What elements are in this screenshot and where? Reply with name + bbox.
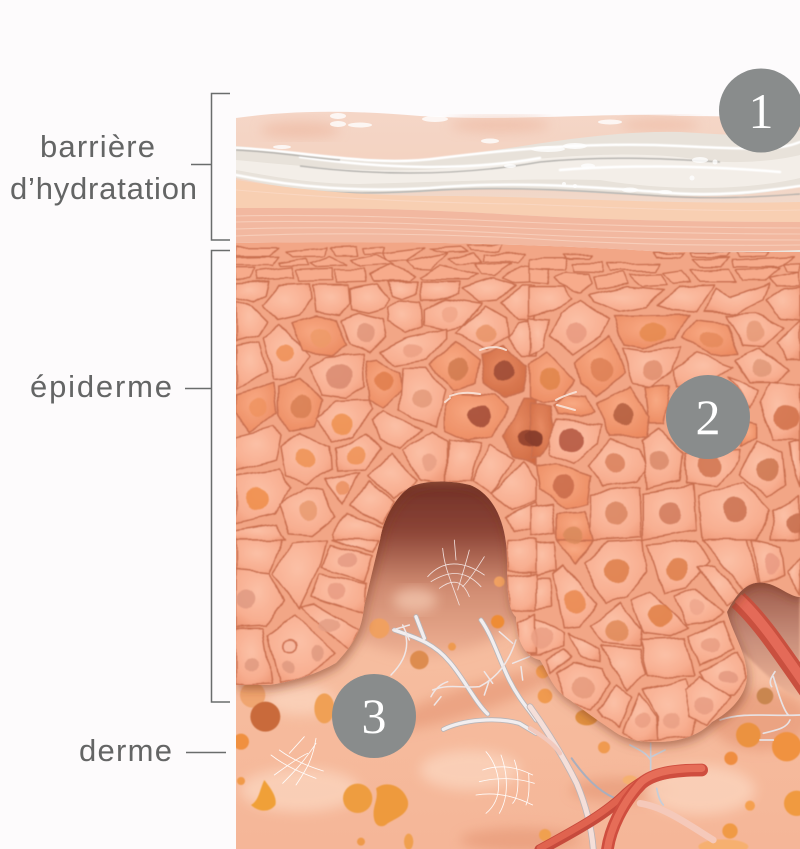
striated layer <box>236 208 800 252</box>
nerve fibres <box>391 617 800 849</box>
vessels: red capillaries bottom <box>540 768 702 849</box>
label: barrière d'hydratation: barrière <box>40 129 155 164</box>
dermis layer <box>236 478 800 849</box>
cell nuclei <box>237 305 800 728</box>
badge 2: 2 <box>696 389 720 445</box>
epidermis layer <box>236 235 800 742</box>
bracket: barrière d'hydratation <box>191 94 230 240</box>
badge 3 <box>332 674 416 758</box>
water film <box>236 113 800 198</box>
vessel: red capillary right <box>738 598 800 696</box>
bracket: épiderme <box>185 250 230 702</box>
label: épiderme: épiderme <box>30 369 172 404</box>
label: barrière d'hydratation <box>10 129 197 206</box>
badge 2 <box>666 375 750 459</box>
label: derme: derme <box>79 733 172 768</box>
peach band <box>236 180 800 222</box>
leader line: derme <box>186 752 226 754</box>
stratum corneum: hydration barrier layers <box>236 112 800 252</box>
label: barrière d'hydratation: d’hydratation <box>10 171 197 206</box>
fat globules <box>233 576 800 849</box>
epidermal cells <box>236 245 800 740</box>
badge 3: 3 <box>362 688 386 744</box>
collagen fibre meshes <box>271 540 534 813</box>
badge 1 <box>719 68 800 152</box>
skin illustration <box>233 112 800 849</box>
pale cell highlights <box>445 347 576 410</box>
badge 1: 1 <box>748 83 774 139</box>
